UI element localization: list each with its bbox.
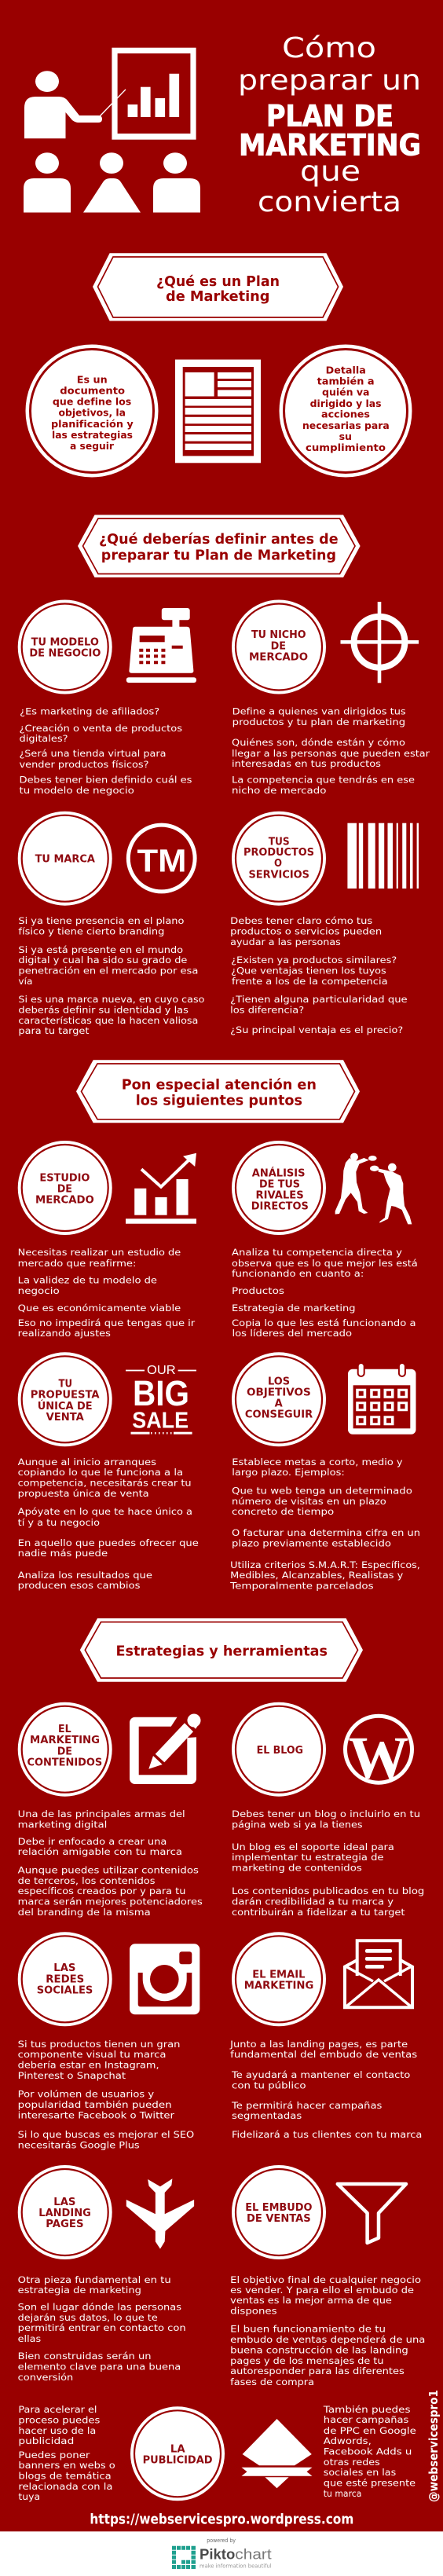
text: objetivos: Que tu web tenga un determinado [232, 1485, 412, 1496]
title: PLAN DE [266, 100, 394, 134]
badge: Las landing pages: LANDING [38, 2208, 91, 2219]
text: objetivos: O facturar una determina cifra en un [232, 1527, 420, 1538]
text: embudo de ventas: autoresponder para las diferentes [230, 2365, 405, 2376]
text: redes sociales: popularidad también pueden [18, 2099, 172, 2110]
text: email marketing: Te permitirá hacer campañas [231, 2100, 382, 2111]
text: análisis de rivales: Analiza tu competencia directa y [232, 1247, 402, 1258]
text: email marketing: segmentadas [232, 2110, 302, 2121]
callout: definition left: objetivos, la [58, 407, 126, 418]
text: tu marca: físico y tiene cierto branding [18, 925, 164, 936]
title: MARKETING [239, 128, 421, 162]
callout: definition left: Es un [77, 374, 108, 385]
text: nicho de mercado: Quiénes son, dónde están y cómo [232, 737, 405, 748]
badge: Tu marca [18, 812, 112, 906]
text: estudio de mercado: negocio [18, 1285, 60, 1296]
text: modelo de negocio: digitales? [19, 733, 68, 744]
text: marketing de contenidos [18, 1808, 203, 1918]
badge: El marketing de contenidos: DE [57, 1746, 72, 1757]
text: propuesta única: En aquello que puedes ofrecer que [18, 1537, 199, 1548]
callout: definition left: que define los [53, 396, 131, 408]
icon: presenter and audience [24, 48, 200, 213]
text: propuesta única: copiando lo que le funciona a la [18, 1467, 183, 1478]
text: productos o servicios: ¿Que ventajas tienen los tuyos [231, 965, 386, 976]
text: propuesta única: producen esos cambios [18, 1580, 141, 1591]
text: publicidad left: hacer uso de la [18, 2425, 96, 2436]
text: el blog: Un blog es el soporte ideal para [232, 1841, 394, 1852]
icon: our big sale [126, 1364, 196, 1435]
badge: El embudo de ventas: DE VENTAS [247, 2213, 311, 2225]
text: productos o servicios: ayudar a las personas [230, 936, 341, 947]
badge: Tu modelo de negocio [18, 600, 112, 694]
text: publicidad left: banners en webs o [18, 2460, 115, 2471]
text: propuesta única: Aunque al inicio arranques [18, 1457, 156, 1468]
callout: definition right: su [339, 431, 352, 442]
badge: Tu propuesta única de venta: PROPUESTA [31, 1390, 100, 1402]
text: publicidad left: proceso puedes [18, 2415, 100, 2426]
text: el blog: Los contenidos publicados en tu blog [232, 1885, 424, 1896]
text: publicidad right: hacer campañas [324, 2414, 408, 2425]
text: landing pages: elemento clave para una buena [18, 2362, 181, 2373]
text: nicho de mercado: llegar a las personas que pueden estar [232, 748, 430, 759]
text: modelo de negocio: ¿Creación o venta de productos [19, 723, 182, 734]
icon: email envelope [345, 1940, 412, 2007]
text: el blog: página web si ya la tienes [232, 1819, 363, 1830]
text: publicidad right: que esté presente [324, 2478, 416, 2489]
text: tu marca: Si es una marca nueva, en cuyo caso [18, 994, 204, 1005]
badge: Tu nicho de mercado: DE [271, 640, 286, 652]
text: tu marca: deberás definir su identidad y las [18, 1004, 189, 1015]
badge: El marketing de contenidos: MARKETING [30, 1735, 100, 1746]
text: propuesta única: Analiza los resultados que [18, 1570, 152, 1581]
badge: Tu modelo de negocio: DE NEGOCIO [29, 648, 101, 660]
text: nicho de mercado: nicho de mercado [232, 785, 327, 796]
footer: powered by Piktochart [0, 2531, 443, 2576]
badge: Análisis de tus rivales directos: DE TUS [259, 1178, 300, 1190]
icon: wordpress: W [349, 1725, 408, 1791]
footer: powered by Piktochart: make information beautiful [200, 2563, 272, 2569]
text: tu marca: penetración en el mercado por esa [18, 965, 198, 976]
text: tu marca: Si ya está presente en el mundo [18, 944, 183, 955]
text: embudo de ventas: fases de compra [230, 2376, 314, 2387]
text: tu marca: características que la hacen valiosa [18, 1015, 198, 1026]
text: publicidad left: blogs de temática [18, 2470, 112, 2481]
text: redes sociales: componente visual tu marca [18, 2049, 167, 2060]
badge: Tu propuesta única de venta: ÚNICA DE [38, 1398, 93, 1413]
heading: Pon especial atención: los siguientes puntos [136, 1093, 302, 1109]
footer: powered by Piktochart: powered by [207, 2538, 236, 2544]
footer: powered by Piktochart: chart [235, 2546, 272, 2562]
text: estudio de mercado: La validez de tu modelo de [18, 1274, 157, 1285]
badge: El marketing de contenidos [18, 1702, 112, 1797]
text: publicidad left: Puedes poner [18, 2450, 90, 2461]
text: tu marca: para tu target [18, 1025, 90, 1036]
callout: definition left: a seguir [70, 440, 115, 452]
website url: https://webservicespro.wordpress.com [90, 2512, 353, 2527]
badge: La publicidad: LA [170, 2444, 185, 2456]
text: análisis de rivales: los líderes del mercado [232, 1328, 352, 1339]
text: productos o servicios: Debes tener claro cómo tus [230, 915, 372, 926]
text: análisis de rivales: observa que es lo que mejor les está [232, 1258, 418, 1269]
text: objetivos: concreto de tiempo [232, 1506, 334, 1517]
badge: Los objetivos a conseguir: LOS [268, 1376, 290, 1387]
badge: Tus productos o servicios: SERVICIOS [248, 869, 309, 881]
heading: Estrategias y herramientas: Estrategias y herramientas [116, 1643, 328, 1660]
text: objetivos: Temporalmente parcelados [229, 1581, 374, 1592]
badge: Las redes sociales: REDES [46, 1973, 84, 1985]
badge: Estudio de mercado: DE [57, 1183, 72, 1195]
text: nicho de mercado [232, 705, 430, 796]
badge: Tu modelo de negocio: TU MODELO [31, 637, 99, 649]
text: landing pages: estrategia de marketing [18, 2285, 141, 2296]
badge: Tus productos o servicios: TUS [269, 836, 290, 848]
text: embudo de ventas: buena construcción de las landing [230, 2344, 408, 2355]
badge: El email marketing: EL EMAIL [252, 1969, 306, 1981]
badge: Análisis de tus rivales directos: ANÁLISIS [252, 1166, 305, 1179]
text: modelo de negocio: Debes tener bien definido cuál es [19, 775, 192, 786]
title: preparar un [238, 64, 421, 97]
text: redes sociales: Si tus productos tienen un gran [18, 2039, 181, 2050]
heading: Qué es un Plan de Marketing: ¿Qué es un Plan [156, 273, 280, 290]
badge: El blog: EL BLOG [257, 1745, 303, 1757]
text: productos o servicios [230, 915, 408, 1035]
text: landing pages: permitirá entrar en contacto con [18, 2322, 186, 2333]
text: estudio de mercado: mercado que reafirme: [18, 1258, 136, 1269]
text: modelo de negocio: ¿Es marketing de afiliados? [20, 705, 159, 716]
badge: Los objetivos a conseguir [232, 1352, 326, 1446]
badge: El embudo de ventas: EL EMBUDO [245, 2202, 313, 2214]
icon: ad diamond ribbon [242, 2419, 313, 2488]
text: embudo de ventas: pages y de los mensajes de tu [230, 2355, 383, 2366]
text: redes sociales: debería estar en Instagram, [18, 2060, 159, 2071]
icon: target [341, 602, 419, 683]
text: marketing de contenidos: Aunque puedes utilizar contenidos [18, 1865, 199, 1876]
callout: definition right: quién va [322, 387, 369, 398]
text: marketing de contenidos: específicos creados por y para tu [18, 1885, 185, 1896]
text: email marketing: fundamental del embudo de ventas [230, 2049, 417, 2060]
text: tu marca [18, 915, 204, 1036]
badge: El blog [232, 1702, 326, 1797]
text: análisis de rivales [232, 1247, 418, 1339]
text: propuesta única: nadie más puede [18, 1548, 108, 1559]
text: nicho de mercado: Define a quienes van dirigidos tus [232, 705, 406, 716]
callout: definition right: Detalla [326, 364, 366, 376]
text: nicho de mercado: productos y tu plan de marketing [232, 716, 405, 727]
heading: Qué deberías definir [78, 515, 361, 577]
badge: Análisis de tus rivales directos: RIVALES [256, 1189, 304, 1201]
text: publicidad left: tuya [18, 2491, 40, 2502]
badge: Las landing pages [18, 2165, 112, 2259]
text: embudo de ventas: El objetivo final de cualquier negocio [230, 2274, 421, 2285]
callout: definition left: documento [60, 384, 125, 396]
text: embudo de ventas: es vender. Y para ello el embudo de [230, 2285, 414, 2296]
callout: definition left [25, 344, 159, 478]
text: el blog: contribuirán a fidelizar a tu target [232, 1907, 405, 1918]
icon: calendar [348, 1363, 416, 1435]
text: propuesta única [18, 1457, 199, 1591]
icon: barcode [347, 823, 419, 889]
text: email marketing: Junto a las landing pages, es parte [229, 2039, 408, 2050]
text: publicidad left: publicidad [18, 2435, 74, 2446]
text: marketing de contenidos: marca serán mejores potenciadores [18, 1896, 203, 1907]
text: embudo de ventas [230, 2274, 425, 2387]
text: objetivos: número de visitas en un plazo [232, 1496, 386, 1507]
text: embudo de ventas: embudo de ventas dependerá de una [230, 2334, 425, 2345]
badge: Tus productos o servicios: O [274, 858, 282, 870]
badge: Tu propuesta única de venta: TU [58, 1379, 72, 1391]
text: tu marca: Si ya tiene presencia en el plano [18, 915, 184, 926]
badge: El embudo de ventas [232, 2165, 326, 2259]
footer: powered by Piktochart: Pikto [200, 2546, 235, 2562]
callout: definition right: también a [317, 376, 375, 387]
badge: Tu propuesta única de venta [18, 1352, 112, 1446]
text: análisis de rivales: Productos [232, 1285, 284, 1296]
badge: Estudio de mercado: ESTUDIO [39, 1172, 90, 1184]
text: objetivos: largo plazo. Ejemplos: [232, 1467, 345, 1478]
text: objetivos: Medibles, Alcanzables, Realistas y [230, 1570, 403, 1581]
badge: Tu nicho de mercado: MERCADO [249, 651, 308, 663]
text: redes sociales: necesitarás Google Plus [18, 2140, 140, 2151]
title: Cómo [282, 32, 376, 64]
badge: El marketing de contenidos: EL [58, 1724, 71, 1735]
text: estudio de mercado: Que es económicamente viable [18, 1303, 181, 1314]
text: el blog: darán credibilidad a tu marca y [232, 1896, 394, 1907]
badge: Los objetivos a conseguir: A [275, 1398, 283, 1410]
heading: Pon especial atención: Pon especial atención en [122, 1077, 317, 1094]
text: objetivos [229, 1457, 420, 1592]
badge: Las redes sociales: SOCIALES [37, 1985, 93, 1997]
text: productos o servicios: los diferencia? [230, 1004, 304, 1015]
icon: document [175, 360, 261, 463]
badge: Las redes sociales: LAS [53, 1962, 75, 1974]
badge: Tu nicho de mercado [232, 600, 326, 694]
text: nicho de mercado: interesadas en tus productos [232, 758, 381, 769]
text: marketing de contenidos: Una de las principales armas del [18, 1808, 185, 1819]
text: embudo de ventas: El buen funcionamiento de tu [230, 2324, 386, 2335]
text: propuesta única: propuesta única de venta [18, 1488, 149, 1499]
text: redes sociales: Por volúmen de usuarios y [18, 2088, 154, 2099]
title: que [300, 156, 361, 188]
text: estudio de mercado: Eso no impedirá que tengas que ir [18, 1317, 195, 1328]
text: el blog [232, 1808, 424, 1918]
text: email marketing: Te ayudará a mantener el contacto [231, 2069, 410, 2080]
text: objetivos: plazo previamente establecido [232, 1538, 391, 1549]
text: análisis de rivales: funcionando en cuanto a: [232, 1268, 364, 1279]
badge: La publicidad [130, 2406, 225, 2501]
badge: Las landing pages: LAS [53, 2197, 75, 2208]
text: landing pages: Son el lugar dónde las personas [18, 2302, 181, 2313]
text: tu marca: digital y cual ha sido su grado de [18, 955, 187, 966]
icon: rising chart [126, 1153, 196, 1224]
text: productos o servicios: productos o servicios pueden [230, 925, 382, 936]
text: publicidad right: tu marca [324, 2488, 361, 2499]
callout: definition right [280, 344, 412, 478]
text: estudio de mercado: Necesitas realizar un estudio de [18, 1247, 181, 1258]
badge: Estudio de mercado [18, 1141, 112, 1235]
badge: Estudio de mercado: MERCADO [35, 1195, 94, 1207]
text: landing pages: dejarán sus datos, lo que te [18, 2312, 158, 2323]
text: el blog: marketing de contenidos [232, 1862, 362, 1873]
callout: definition right: cumplimiento [306, 442, 386, 453]
text: modelo de negocio [19, 705, 192, 796]
text: redes sociales: Pinterest o Snapchat [18, 2070, 126, 2081]
callout: definition right: dirigido y las [310, 398, 382, 409]
text: publicidad right: Adwords, [324, 2435, 372, 2446]
heading: Qué es un Plan de Marketing [93, 253, 343, 321]
text: redes sociales: interesarte Facebook o Twitter [18, 2110, 174, 2121]
text: nicho de mercado: La competencia que tendrás en ese [232, 775, 415, 786]
text: marketing de contenidos: marketing digital [18, 1819, 107, 1830]
text: publicidad right: otras redes [324, 2457, 380, 2468]
text: publicidad left: Para acelerar el [18, 2404, 97, 2415]
badge: Tu nicho de mercado: TU NICHO [251, 629, 306, 641]
text: análisis de rivales: Copia lo que les está funcionando a [232, 1317, 416, 1328]
icon: instagram [130, 1944, 200, 2014]
text: email marketing: con tu público [232, 2080, 306, 2091]
text: email marketing [229, 2039, 422, 2140]
text: modelo de negocio: vender productos físicos? [19, 759, 149, 770]
text: estudio de mercado [18, 1247, 195, 1339]
text: publicidad left [18, 2404, 115, 2502]
text: email marketing: Fidelizará a tus clientes con tu marca [232, 2129, 422, 2140]
text: productos o servicios: ¿Su principal ventaja es el precio? [230, 1024, 403, 1035]
icon: airplane [126, 2178, 194, 2249]
text: propuesta única: tí y a tu negocio [18, 1517, 100, 1528]
badge: El marketing de contenidos: CONTENIDOS [27, 1757, 102, 1768]
text: redes sociales [18, 2039, 194, 2151]
text: publicidad right: También puedes [323, 2404, 411, 2415]
text: objetivos: Establece metas a corto, medio y [232, 1457, 403, 1468]
icon: trademark [128, 825, 195, 892]
text: productos o servicios: ¿Tienen alguna particularidad que [230, 994, 408, 1005]
heading: Qué es un Plan de Marketing: de Marketing [166, 288, 270, 305]
text: el blog: implementar tu estrategia de [232, 1852, 383, 1863]
text: propuesta única: Apóyate en lo que te hace único a [18, 1506, 192, 1517]
icon: our big sale: SALE [132, 1408, 189, 1433]
text: productos o servicios: frente a los de la competencia [232, 976, 388, 987]
badge: Las landing pages: PAGES [46, 2219, 83, 2230]
badge: Tu propuesta única de venta: VENTA [46, 1412, 85, 1424]
badge: Tus productos o servicios: PRODUCTOS [243, 847, 314, 859]
heading: Estrategias y herramientas [80, 1618, 363, 1682]
text: publicidad left: relacionada con la [18, 2481, 112, 2492]
badge: Análisis de tus rivales directos [232, 1141, 326, 1235]
title: convierta [258, 186, 401, 218]
icon: funnel [338, 2184, 406, 2243]
text: modelo de negocio: ¿Será una tienda virtual para [19, 748, 166, 759]
text: embudo de ventas: ventas es la mejor arma de que [230, 2295, 392, 2306]
text: análisis de rivales: Estrategia de marketing [232, 1303, 355, 1314]
badge: El email marketing: MARKETING [244, 1980, 313, 1992]
icon: boxers [335, 1153, 412, 1224]
text: redes sociales: Si lo que buscas es mejorar el SEO [18, 2129, 194, 2140]
text: publicidad right [323, 2404, 416, 2499]
title [238, 32, 421, 218]
text: landing pages: Bien construidas serán un [18, 2351, 152, 2362]
callout: definition left: las estrategias [52, 429, 133, 441]
vertical handle: @webservicespro1 [427, 2390, 441, 2502]
text: tu marca: vía [18, 976, 32, 987]
badge: Análisis de tus rivales directos: DIRECTOS [251, 1200, 309, 1212]
icon: cash register [126, 608, 196, 683]
callout: definition right: necesarias para [302, 420, 390, 431]
text: landing pages: conversión [18, 2372, 73, 2383]
text: landing pages: ellas [18, 2333, 41, 2344]
text: publicidad right: de PPC en Google [324, 2425, 416, 2436]
text: el blog: Debes tener un blog o incluirlo en tu [232, 1808, 420, 1819]
icon: edit pencil [130, 1714, 201, 1784]
text: landing pages: Otra pieza fundamental en tu [18, 2274, 171, 2285]
text: modelo de negocio: tu modelo de negocio [19, 785, 134, 796]
badge: Tus productos o servicios [232, 812, 326, 906]
icon: our big sale: OUR [147, 1364, 176, 1377]
heading: Qué deberías definir: preparar tu Plan de Marketing [101, 548, 336, 564]
badge: El email marketing [232, 1932, 326, 2026]
icon: our big sale: BIG [133, 1373, 189, 1413]
text: marketing de contenidos: del branding de la misma [18, 1907, 151, 1918]
badge: Los objetivos a conseguir: OBJETIVOS [247, 1387, 311, 1398]
text: publicidad right: sociales en las [324, 2467, 396, 2478]
callout: definition right: acciones [321, 409, 370, 420]
text: productos o servicios: ¿Existen ya productos similares? [231, 955, 397, 966]
heading: Qué deberías definir: ¿Qué deberías definir antes de [99, 531, 339, 548]
text: objetivos: Utiliza criterios S.M.A.R.T: Específicos, [230, 1559, 420, 1570]
text: landing pages [18, 2274, 186, 2383]
badge: Los objetivos a conseguir: CONSEGUIR [245, 1409, 313, 1421]
text: marketing de contenidos: Debe ir enfocado a crear una [18, 1836, 167, 1847]
text: estudio de mercado: realizando ajustes [18, 1328, 111, 1339]
badge: Las redes sociales [18, 1932, 112, 2026]
text: marketing de contenidos: relación amigable con tu marca [18, 1846, 182, 1857]
badge: Tu marca: TU MARCA [35, 854, 96, 866]
text: publicidad right: Facebook Adds u [324, 2446, 412, 2457]
text: marketing de contenidos: de terceros, los contenidos [18, 1875, 155, 1886]
badge: La publicidad: PUBLICIDAD [143, 2455, 213, 2467]
text: embudo de ventas: dispones [230, 2305, 277, 2316]
callout: definition left: planificación y [51, 418, 134, 430]
text: propuesta única: competencia, necesitarás crear tu [18, 1477, 192, 1488]
heading: Pon especial atención [76, 1060, 360, 1123]
icon: trademark: TM [137, 842, 187, 878]
